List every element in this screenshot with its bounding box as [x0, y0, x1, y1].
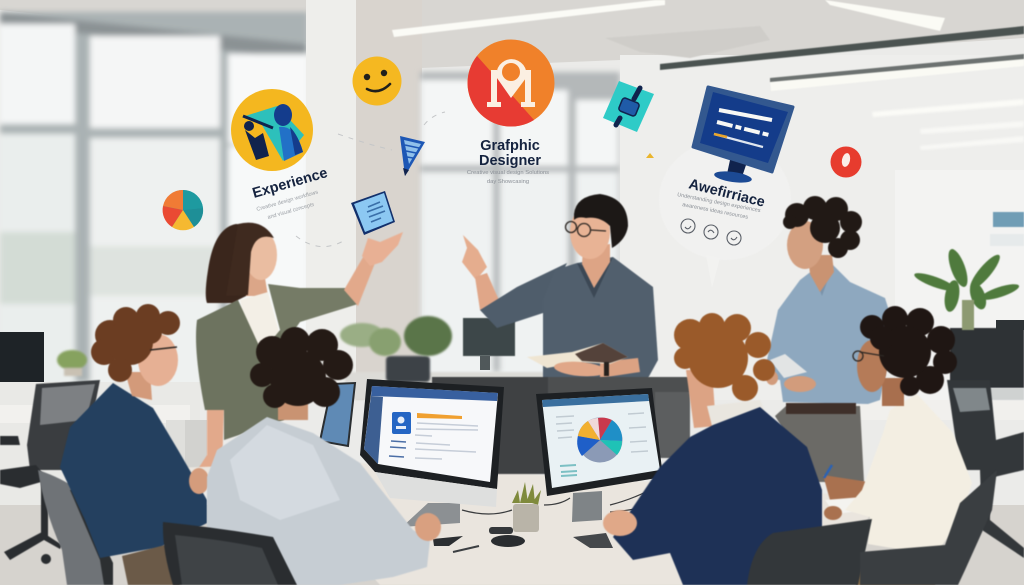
trousers	[775, 406, 864, 482]
forearm	[823, 475, 878, 500]
label: Experience: Experience	[251, 165, 329, 202]
curly hair	[674, 313, 775, 401]
neck and face	[125, 372, 152, 400]
pie chart	[577, 418, 622, 462]
shirt	[207, 417, 430, 585]
curly hair	[91, 304, 180, 382]
pillar	[306, 0, 358, 400]
dashed connector arcs	[296, 112, 445, 247]
chair	[747, 519, 872, 585]
hair	[574, 194, 628, 248]
hands	[784, 376, 816, 392]
curly hair	[783, 196, 862, 258]
bubble small text: Understanding design experiences	[677, 192, 761, 214]
phone	[489, 527, 513, 534]
glasses	[150, 347, 177, 350]
icon: blue funnel	[400, 136, 425, 176]
blazer raised sleeve	[268, 284, 358, 345]
blazer	[613, 407, 822, 585]
chair	[38, 470, 113, 585]
belt	[786, 403, 856, 414]
person: centre man with book	[462, 194, 658, 393]
label: Experience: Creative design workflows	[256, 189, 319, 213]
icon: document card	[351, 191, 395, 235]
small icons in bubble	[681, 219, 741, 245]
white blouse	[240, 292, 280, 352]
person: curly man standing right	[763, 196, 895, 482]
person: seated front left, navy shirt	[38, 304, 209, 585]
monitor: document app	[360, 379, 504, 527]
forearm	[475, 273, 502, 310]
left laptop behind desk	[320, 383, 355, 446]
centre dark partition	[432, 377, 690, 474]
pen	[453, 546, 479, 552]
belt	[546, 386, 630, 393]
label: Graphic Designer: Grafphic	[480, 138, 540, 154]
right chair	[860, 470, 997, 585]
person: right woman seated	[823, 306, 972, 585]
label: Graphic Designer: Creative visual design Solutions	[467, 170, 549, 176]
hand	[603, 510, 637, 536]
icon: monitor	[693, 87, 793, 185]
shirt	[543, 257, 658, 388]
small yellow triangle	[646, 153, 654, 158]
navy shirt	[60, 383, 207, 558]
bubble small text: awareness ideas resources	[682, 202, 749, 221]
hand	[462, 235, 487, 280]
neck	[278, 398, 308, 420]
neck and face	[808, 255, 834, 292]
forearm	[344, 252, 377, 306]
person: seated front centre, grey shirt	[163, 327, 441, 585]
person: woman standing	[196, 223, 403, 472]
neck	[686, 370, 716, 428]
right wall	[620, 55, 1024, 400]
collar	[707, 400, 765, 430]
label: Experience: and visual concepts	[267, 202, 315, 221]
face	[245, 230, 277, 280]
plant pot	[512, 482, 541, 505]
ceiling	[0, 0, 1024, 68]
background office chairs	[0, 380, 1024, 564]
sleeve	[480, 263, 567, 328]
centre window	[420, 72, 620, 377]
ceiling fittings	[660, 26, 1024, 70]
icon: smiley	[352, 56, 402, 106]
open book	[527, 343, 628, 368]
glasses	[860, 352, 884, 356]
neck	[246, 272, 268, 296]
floating icon: colour wheel	[163, 190, 203, 230]
hand on book	[553, 360, 607, 378]
lower arm	[196, 405, 224, 472]
tablet	[770, 354, 807, 378]
pen	[824, 465, 832, 478]
label: Graphic Designer: Designer	[479, 153, 541, 169]
sign on the wall	[993, 212, 1024, 227]
curly hair	[250, 327, 353, 408]
curly hair	[860, 306, 957, 396]
speech bubble: awareness	[659, 87, 793, 288]
hand	[362, 232, 403, 266]
forearm over book	[600, 358, 640, 378]
desk	[172, 462, 880, 585]
olive blazer body	[196, 300, 296, 440]
label: Graphic Designer	[467, 138, 549, 185]
neck	[582, 244, 610, 288]
label: Graphic Designer: day Showcasing	[487, 179, 529, 185]
icon: red badge	[830, 146, 862, 178]
icon: teal tag	[603, 81, 654, 132]
icon: Graphic Designer badge	[468, 40, 554, 127]
trousers	[852, 548, 945, 585]
tablet	[433, 536, 463, 546]
desk objects	[433, 482, 660, 552]
label: Awefirriace: Awefirriace	[687, 176, 767, 211]
mouse	[491, 535, 525, 547]
left window wall	[0, 12, 308, 388]
label: Experience	[251, 165, 329, 221]
shirt	[845, 394, 972, 555]
shirt	[763, 264, 895, 404]
plants in background	[57, 247, 1021, 376]
papers	[825, 497, 868, 514]
hand	[415, 513, 441, 541]
chair	[163, 522, 297, 585]
hair	[206, 224, 262, 303]
monitor: pie chart dashboard	[536, 388, 663, 522]
hand on desk	[189, 468, 209, 494]
neck and face	[882, 378, 904, 406]
glasses	[566, 222, 606, 236]
face	[570, 205, 610, 259]
floor and low furniture	[0, 505, 1024, 585]
icon: experience badge	[231, 89, 313, 171]
person: seated front right, navy blazer	[603, 313, 872, 585]
cables	[462, 490, 660, 514]
keyboard	[573, 533, 613, 548]
